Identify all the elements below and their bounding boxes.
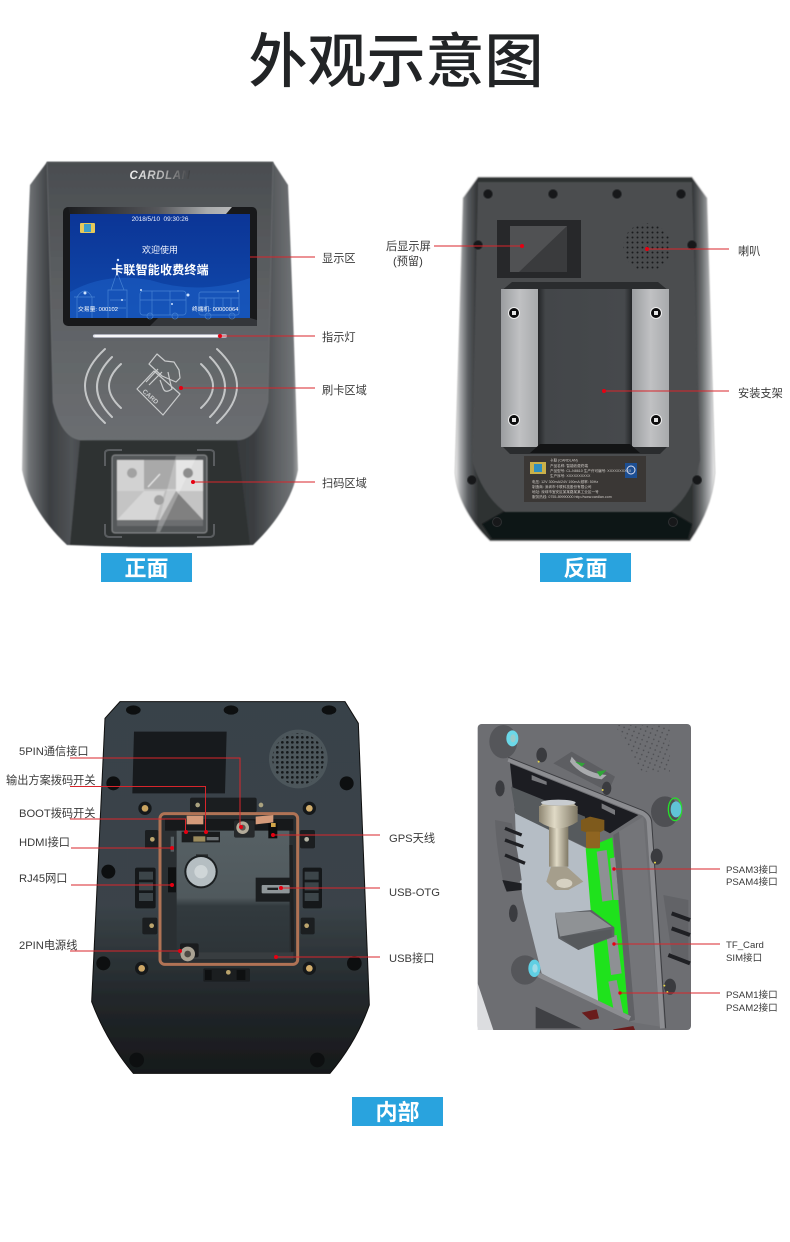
screen card icon [80,223,95,233]
brass inserts [135,802,316,975]
pcb header [182,832,220,842]
nameplate: 产品型号: CL-N8610 生产许可编号: XXXXXXXXXX [550,468,632,473]
model brass connector [581,817,604,848]
callout: card swipe area: 刷卡区域 [322,384,367,397]
callout: rear display (reserved) [386,240,524,268]
callout: BOOT DIP switch [19,806,188,834]
callout: scan area: 扫码区域 [322,477,367,490]
interior speaker [269,730,328,788]
model light floor [515,813,600,1005]
model bottom corner [478,983,493,1030]
nameplate: 产品名称: 智能收费终端 [550,463,588,468]
screen welcome: 欢迎使用 [142,244,178,255]
model frame rails [508,759,662,1028]
speaker grille [623,223,671,271]
3D model: card slot detail [478,724,691,1030]
bracket screws [508,308,662,426]
tag: front: 正面 [124,556,169,581]
callout: 2PIN power cable [19,938,182,953]
callout: output DIP switch [6,773,208,834]
callout: TF card and SIM [612,940,764,964]
tag: interior: 内部 [375,1100,420,1125]
nameplate: 电压: 12V 300mA/24V 190mA 频率: 50Hz [532,479,598,484]
pcb strip [291,845,293,952]
callout: USB port: USB接口 [389,952,434,965]
callout: GPS antenna [271,831,435,845]
callout: PSAM3 and PSAM4 [612,864,778,888]
model red parts [582,1009,635,1030]
model usb block [555,910,614,950]
callout: HDMI port: HDMI接口 [19,836,70,849]
callout: BOOT DIP switch: BOOT拨码开关 [19,806,95,820]
model inner plate [613,817,660,1027]
device: front view [22,162,298,547]
logo: CARDLAN: CARDLAN [129,170,191,182]
front face panel [47,162,273,440]
nameplate: 制造商: 深圳市卡联科技股份有限公司 [532,484,592,489]
front body shell [22,162,298,547]
callout: indicator light [218,330,356,344]
callout: rear display (reserved): 后显示屏 [386,240,431,253]
model background [478,724,691,1030]
top clips [142,798,315,982]
screen trade count: 交易量: 000102 [78,305,118,313]
callout: RJ45 port [19,873,174,887]
model memory slots [597,850,623,1013]
screen terminal id: 终端机: 00000064 [192,305,239,313]
model left clip [495,820,525,892]
device: interior view [92,702,369,1073]
tag: interior [352,1097,443,1126]
model right clip [663,895,690,963]
callout: USB-OTG [279,886,440,899]
callout: PSAM3 and PSAM4: PSAM3接口 [726,864,778,876]
callout: TF card and SIM: SIM接口 [726,952,762,964]
bottom rear latch [205,970,245,980]
back plate [472,182,700,512]
callout: USB port [274,952,434,965]
reserved rear display recess [132,732,227,793]
back body shell [455,177,715,541]
nameplate: 卡联 (CARDLAN) [550,458,578,462]
callout: RJ45 port: RJ45网口 [19,873,68,885]
callout: card swipe area [179,384,367,397]
rj45 slot [168,867,176,892]
usb otg cable [256,878,290,902]
device: back view [455,177,715,541]
indicator light bar [93,334,227,338]
coin cell battery [184,854,218,888]
icon: hand with card: CARD [141,388,160,406]
interior shell [92,702,369,1073]
model speaker dots [615,725,670,772]
icon: hand with card [137,354,180,415]
model standoffs with cyan rings [489,725,682,985]
callout: speaker: 喇叭 [738,244,760,258]
callout: TF card and SIM: TF_Card [726,940,764,951]
model antenna connector [539,800,583,890]
hdmi slot [171,837,174,852]
nameplate: 服务热线: 0755-89990000 http://www.cardlan.com [532,494,612,499]
orange gasket frame [160,814,298,964]
callout: scan area [191,477,367,490]
callout: PSAM1 and PSAM2: PSAM2接口 [726,1002,778,1014]
tag: back: 反面 [563,556,608,581]
callout: rear display (reserved): (预留) [393,255,423,268]
icon: contactless waves [85,349,237,423]
back screws [468,190,702,526]
model upper dark recess [510,763,638,833]
back bottom band [482,511,692,539]
model green pcb [586,837,629,1015]
nameplate: 生产序号: XXXXXXXXXX [550,473,591,478]
upper rail [165,819,293,831]
callout: display area: 显示区 [322,252,356,265]
callout: 2PIN power cable: 2PIN电源线 [19,938,77,952]
screen skyline decoration [74,272,239,319]
callout: indicator light: 指示灯 [322,330,356,344]
nameplate [524,456,646,502]
screen [63,207,257,326]
rear display [497,220,581,278]
model bottom rail dark [536,1007,582,1028]
side latches [135,868,322,908]
title: 外观示意图 [248,29,544,95]
mounting bracket [501,282,669,454]
callout: 5PIN comm port [19,745,243,829]
tag: front [101,553,192,582]
2pin connector [180,943,199,961]
screen product name: 卡联智能收费终端 [111,262,209,277]
tag: back [540,553,631,582]
cavity floor [177,831,289,952]
gasket tabs [187,815,273,824]
callout: display area [250,252,356,265]
callout: mounting bracket: 安装支架 [738,386,783,400]
gps connector [234,820,255,838]
model small screw seats [495,748,676,995]
callout: GPS antenna: GPS天线 [389,831,435,845]
nameplate: 地址: 深圳市宝安区某某路某某工业区一号 [532,489,599,494]
callout: PSAM3 and PSAM4: PSAM4接口 [726,876,778,888]
callout: mounting bracket [602,386,783,400]
lower rail [169,952,293,959]
interior holes [96,705,362,1067]
callout: HDMI port [19,836,174,850]
callout: PSAM1 and PSAM2 [618,989,778,1014]
callout: PSAM1 and PSAM2: PSAM1接口 [726,989,778,1001]
callout: output DIP switch: 输出方案拨码开关 [6,773,96,787]
gps antenna socket [268,823,277,838]
scan corner brackets [105,450,214,537]
scan window [112,455,207,533]
callout: speaker [645,244,760,258]
callout: 5PIN comm port: 5PIN通信接口 [19,745,89,758]
model top clips [532,752,615,815]
callout: USB-OTG: USB-OTG [389,887,440,899]
screen date: 2018/5/10 09:30:26 [132,216,189,223]
